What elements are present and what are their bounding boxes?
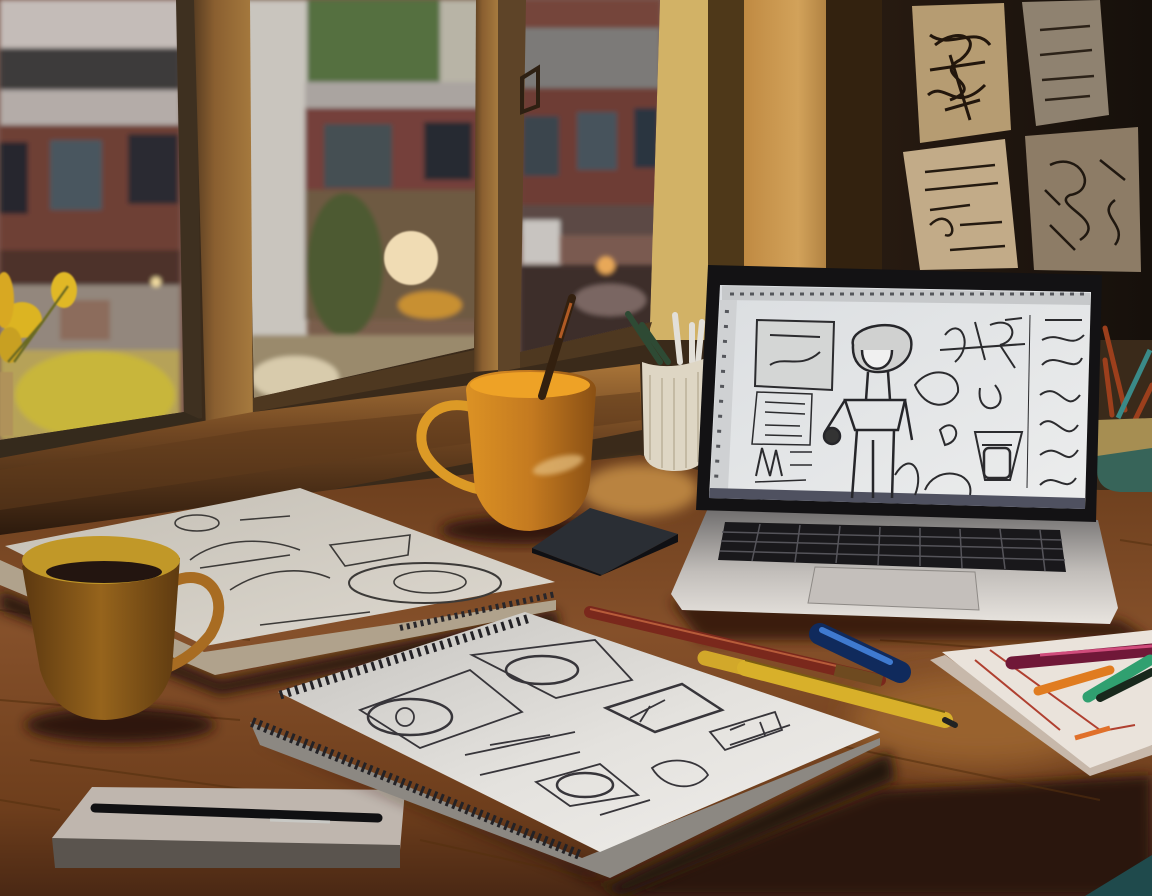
screen toolbars (709, 286, 1090, 509)
red pencil (590, 609, 882, 681)
notebook shadow (0, 590, 560, 695)
screen drawing: text boxes (752, 320, 834, 482)
window left pane with blurred street (0, 0, 184, 440)
mug handle (421, 405, 482, 490)
white pencil holder (628, 314, 706, 471)
screen bezel (696, 265, 1102, 522)
window middle pane (240, 0, 480, 405)
desk surface (0, 455, 1152, 896)
notepad with pen (52, 787, 405, 868)
note: top right (1022, 0, 1109, 126)
colored pens (1012, 650, 1152, 663)
notebook sketches (360, 640, 790, 815)
notebook shadow (560, 752, 895, 896)
window frame and mullions (0, 0, 652, 458)
window sill (0, 364, 642, 535)
notebook top left (0, 488, 560, 695)
spiral binding (400, 594, 556, 628)
coffee (46, 561, 162, 583)
screen drawing: scribbles (895, 315, 1084, 495)
mug handle (166, 578, 219, 668)
mug shadow (25, 707, 215, 743)
blue marker (820, 630, 900, 672)
notebook sketches (175, 515, 501, 625)
mug body (466, 370, 596, 531)
spiral binding left (252, 722, 580, 855)
laptop (670, 265, 1152, 640)
note: lower left (903, 139, 1018, 270)
black sticky pad (532, 508, 678, 576)
spiral notebook front (250, 612, 895, 896)
screen (709, 285, 1091, 509)
window right pane (515, 0, 665, 360)
papers and pens right (930, 630, 1152, 776)
screen drawing: character (824, 325, 912, 498)
yellow flowers (0, 272, 77, 436)
yellow marker (705, 658, 955, 725)
note: top left (912, 3, 1011, 143)
pen (95, 808, 378, 818)
spiral binding top (280, 618, 530, 695)
papers pinned on wall (903, 0, 1141, 272)
pencil in mug (542, 298, 572, 396)
teal object bottom right (1085, 855, 1152, 896)
pen cup: right edge (1097, 328, 1152, 492)
note: lower right (1025, 127, 1141, 272)
laptop base (671, 508, 1118, 624)
keyboard (718, 522, 1066, 572)
laptop shadow (670, 600, 1152, 640)
mug shadow (440, 516, 600, 544)
wall and wood backdrop (0, 0, 1152, 560)
orange mug on sill (421, 298, 600, 544)
coffee mug left (22, 536, 219, 743)
sun glare (384, 231, 438, 285)
mug body (22, 541, 180, 720)
trackpad (808, 567, 979, 610)
